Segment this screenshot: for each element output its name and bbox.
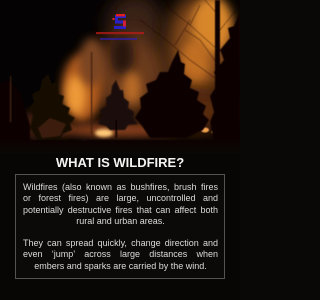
paragraph 1: potentially destructive fires that can affect both xyxy=(23,205,218,215)
centre tree xyxy=(98,80,138,130)
wildfire night forest photo xyxy=(9,0,240,141)
paragraph 1: or forest fires) are large, uncontrolled and xyxy=(23,193,218,203)
smoke and flames xyxy=(17,0,238,145)
paragraph 2: even ‘jump’ across large distances when xyxy=(23,249,218,259)
foreground ground xyxy=(0,140,240,154)
far left silhouette xyxy=(0,80,30,145)
logo mark xyxy=(112,14,126,29)
tree silhouettes xyxy=(0,0,240,154)
paragraph 1 xyxy=(23,182,218,226)
logo text lines xyxy=(96,32,144,40)
paragraph 1: rural and urban areas. xyxy=(76,216,165,226)
right trees xyxy=(135,50,209,138)
paragraph 2: They can spread quickly, change direction and xyxy=(23,238,218,248)
logo xyxy=(96,14,144,40)
heading: WHAT IS WILDFIRE? xyxy=(56,155,184,170)
bare branches xyxy=(140,0,240,80)
left tree xyxy=(29,74,75,145)
paragraph 2 xyxy=(23,238,218,271)
left tree lit lower branches xyxy=(38,118,66,138)
lower glow fade xyxy=(0,138,240,154)
paragraph 2: embers and sparks are carried by the wind. xyxy=(34,261,207,271)
text panel xyxy=(15,174,225,279)
paragraph 1: Wildfires (also known as bushfires, brush fires xyxy=(23,182,218,192)
